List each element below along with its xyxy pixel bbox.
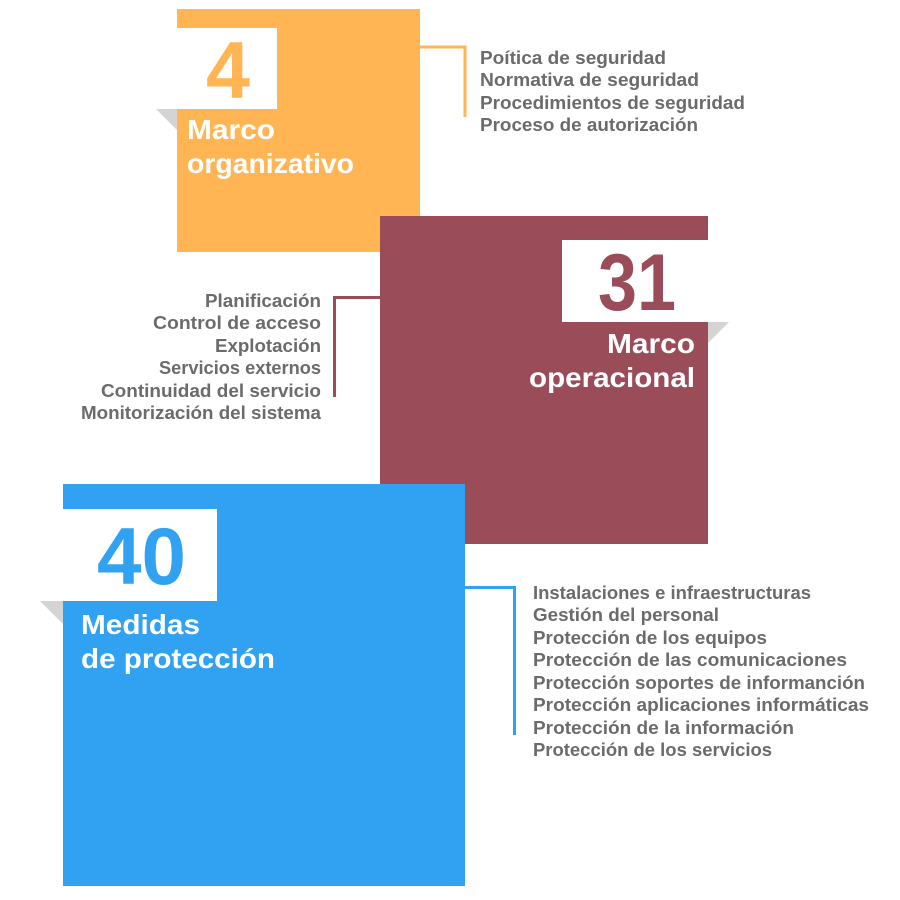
list: marco operacional items: Explotación: [215, 335, 321, 356]
list: marco operacional items: Monitorización del sistema: [81, 402, 322, 423]
panel: marco operacional: [380, 216, 729, 544]
number 4: 4: [206, 26, 250, 116]
list: medidas de protección items: Protección de los equipos: [533, 627, 767, 648]
list: marco operacional items: Planificación: [205, 290, 321, 311]
connector: blue: [465, 588, 514, 735]
white number tab: [63, 509, 217, 601]
list: medidas de protección items: Protección de las comunicaciones: [533, 649, 847, 670]
white number tab: [177, 28, 277, 109]
list: marco operacional items: Control de acceso: [153, 312, 321, 333]
number 40: 40: [97, 512, 186, 602]
heading: marco organizativo: [187, 114, 354, 179]
white number tab: [562, 240, 708, 322]
list: marco operacional items: Continuidad del servicio: [101, 380, 321, 401]
list: marco organizativo items: Proceso de autorización: [480, 114, 698, 135]
heading: medidas de protección: de protección: [81, 643, 275, 674]
list: medidas de protección items: Protección aplicaciones informáticas: [533, 694, 869, 715]
heading: medidas de protección: Medidas: [81, 609, 200, 640]
panel: medidas de protección: [40, 484, 465, 886]
number 31: 31: [598, 238, 676, 328]
maroon square: [380, 216, 708, 544]
orange square: [177, 9, 420, 252]
list: medidas de protección items: Protección de los servicios: [533, 739, 772, 760]
list: medidas de protección items: Gestión del personal: [533, 604, 719, 625]
heading: marco operacional: [529, 328, 695, 393]
list: medidas de protección items: Protección de la información: [533, 717, 794, 738]
heading: marco operacional: Marco: [607, 328, 695, 359]
list: marco organizativo items: Normativa de seguridad: [480, 69, 699, 90]
connector: maroon: [334, 298, 380, 397]
list: medidas de protección items: Protección soportes de informanción: [533, 672, 865, 693]
tab fold: [156, 109, 177, 130]
list: marco organizativo items: Procedimientos de seguridad: [480, 92, 745, 113]
connector: orange: [420, 47, 465, 117]
heading: marco organizativo: organizativo: [187, 148, 354, 179]
tab fold: [708, 322, 729, 343]
list: marco operacional items: [81, 290, 322, 423]
blue square: [63, 484, 465, 886]
heading: marco organizativo: Marco: [187, 114, 275, 145]
list: medidas de protección items: Instalaciones e infraestructuras: [533, 582, 811, 603]
list: marco organizativo items: Poítica de seguridad: [480, 47, 666, 68]
tab fold: [40, 601, 63, 624]
list: marco organizativo items: [480, 47, 745, 135]
panel: marco organizativo: [156, 9, 420, 252]
list: marco operacional items: Servicios externos: [159, 357, 321, 378]
list: medidas de protección items: [533, 582, 869, 760]
heading: medidas de protección: [81, 609, 275, 674]
heading: marco operacional: operacional: [529, 362, 695, 393]
